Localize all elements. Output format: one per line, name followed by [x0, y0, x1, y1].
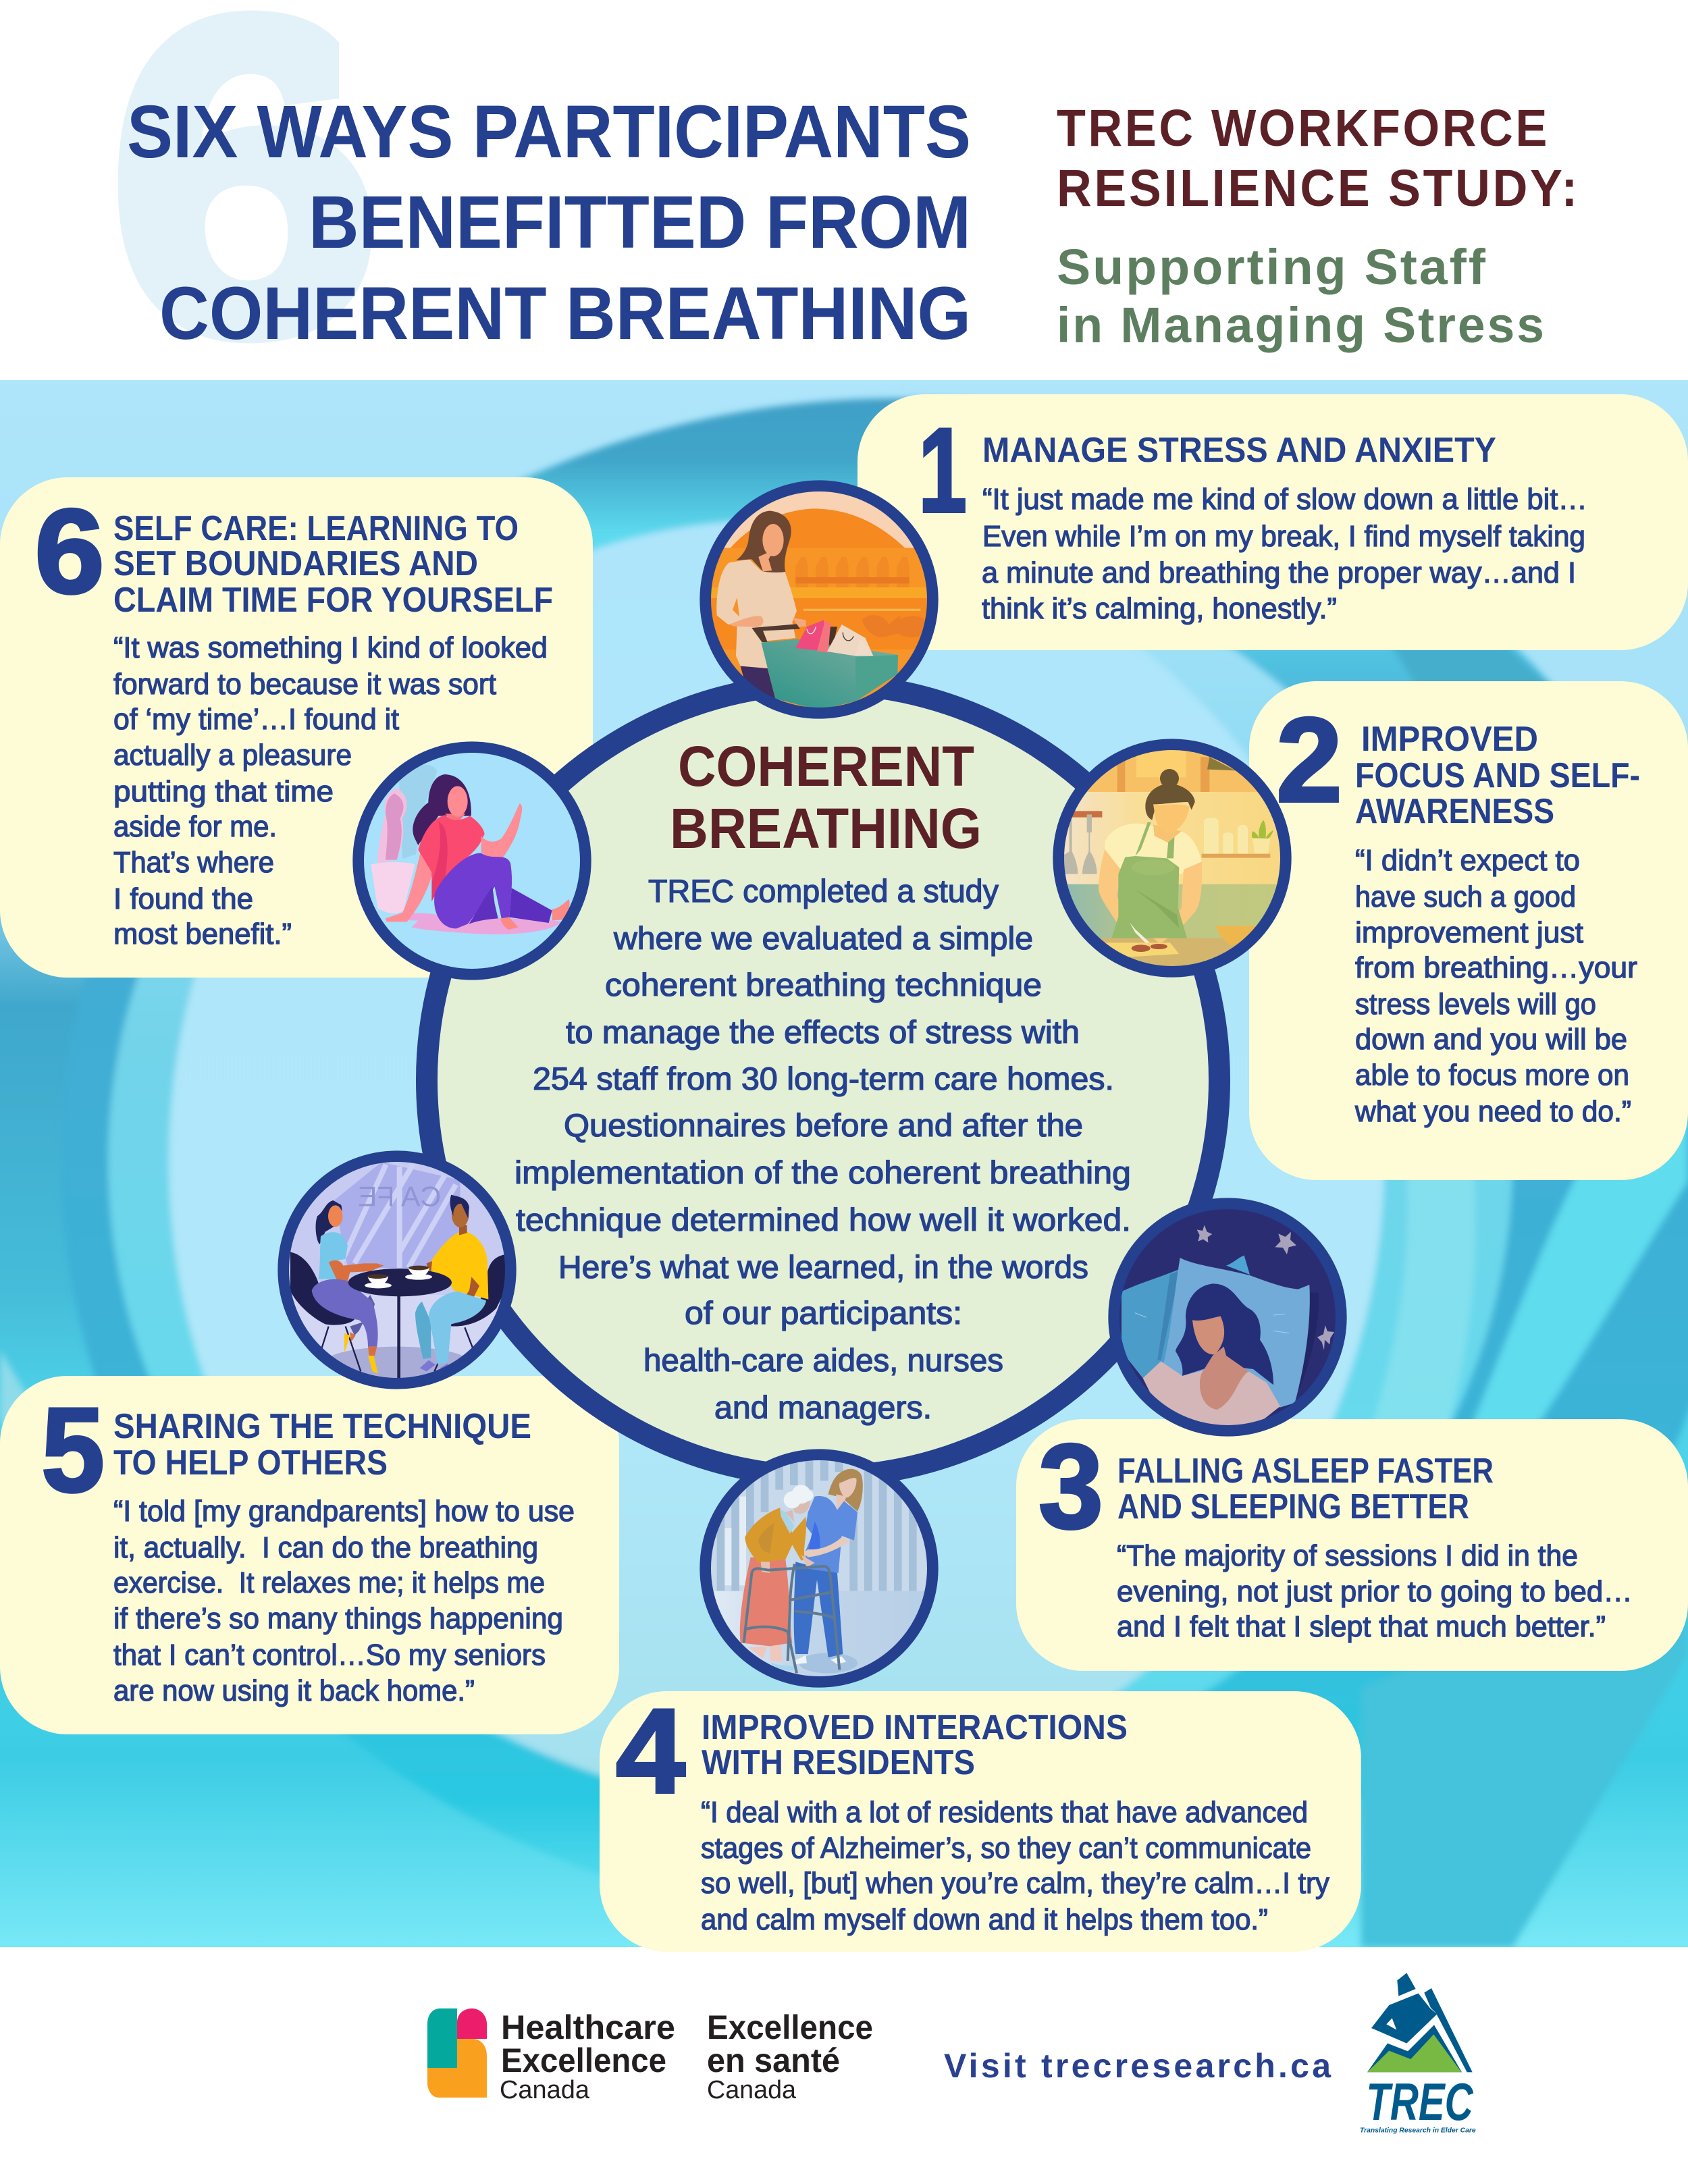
quote 4: [701, 1796, 1329, 1936]
quote 1: “It just made me kind of slow down a little bit…: [982, 483, 1587, 516]
quote 6: [113, 631, 548, 951]
quote 6: of ‘my time’…I found it: [113, 703, 399, 736]
icon: two people at cafe table: [273, 1146, 521, 1393]
central description: to manage the effects of stress with: [566, 1014, 1080, 1050]
main title: SIX WAYS PARTICIPANTS: [127, 90, 971, 174]
quote 3: [1117, 1539, 1633, 1643]
quote 5: if there’s so many things happening: [113, 1602, 563, 1635]
heading 6: SELF CARE: LEARNING TO: [113, 509, 519, 548]
icon: two people at cafe table: CA FE: [358, 1180, 441, 1212]
study heading: [1057, 99, 1580, 217]
central description: Here’s what we learned, in the words: [558, 1249, 1088, 1285]
quote 2: “I didn’t expect to: [1355, 844, 1580, 877]
logo wordmark english: Excellence: [501, 2042, 666, 2079]
quote 5: are now using it back home.”: [113, 1674, 475, 1707]
central heading: COHERENT: [678, 735, 974, 798]
main title: [127, 90, 971, 355]
quote 5: it, actually. I can do the breathing: [113, 1531, 538, 1564]
logo mark: [427, 2008, 487, 2098]
heading 6: SET BOUNDARIES AND: [113, 544, 478, 583]
quote 5: “I told [my grandparents] how to use: [113, 1495, 575, 1528]
main title: COHERENT BREATHING: [159, 272, 971, 355]
central description: of our participants:: [685, 1295, 962, 1331]
heading 1: MANAGE STRESS AND ANXIETY: [982, 431, 1496, 470]
website link: Visit trecresearch.ca: [944, 2047, 1331, 2085]
heading 2: IMPROVED: [1361, 720, 1538, 759]
number 2: 2: [1276, 693, 1342, 827]
heading 4: WITH RESIDENTS: [702, 1743, 975, 1782]
heading 4: [702, 1708, 1128, 1782]
quote 6: actually a pleasure: [113, 739, 352, 772]
study heading: RESILIENCE STUDY:: [1057, 159, 1580, 217]
card 5: sharing the technique: [0, 1376, 619, 1734]
card 2: improved focus: [1249, 681, 1688, 1180]
logo wordmark french: en santé: [707, 2042, 840, 2079]
quote 6: most benefit.”: [113, 917, 292, 951]
study subtitle: Supporting Staff: [1057, 239, 1487, 295]
healthcare excellence canada logo: [427, 2008, 873, 2104]
icon: woman cooking in kitchen: [1049, 735, 1296, 982]
central heading: [670, 735, 982, 860]
quote 3: and I felt that I slept that much better.”: [1117, 1610, 1606, 1643]
heading 4: IMPROVED INTERACTIONS: [702, 1708, 1128, 1747]
quote 2: from breathing…your: [1355, 951, 1637, 984]
heading 6: CLAIM TIME FOR YOURSELF: [113, 581, 553, 620]
quote 6: forward to because it was sort: [113, 668, 496, 701]
quote 2: [1354, 844, 1637, 1128]
heading 5: [113, 1407, 531, 1483]
quote 5: exercise. It relaxes me; it helps me: [113, 1566, 545, 1599]
icon: woman sitting and resting: [348, 737, 596, 984]
quote 6: putting that time: [113, 775, 334, 808]
quote 3: evening, not just prior to going to bed…: [1117, 1575, 1633, 1608]
number 5: 5: [41, 1383, 105, 1517]
card 1: manage stress and anxiety: [858, 394, 1688, 650]
central description: 254 staff from 30 long-term care homes.: [533, 1061, 1114, 1096]
number 6: 6: [34, 484, 105, 618]
logo wordmark french: Excellence: [707, 2008, 873, 2046]
logo wordmark english: Healthcare: [501, 2008, 675, 2046]
heading 5: SHARING THE TECHNIQUE: [113, 1407, 531, 1446]
quote 2: have such a good: [1355, 880, 1576, 913]
study subtitle: in Managing Stress: [1057, 297, 1546, 353]
quote 2: what you need to do.”: [1354, 1095, 1631, 1128]
central heading: BREATHING: [670, 797, 982, 860]
quote 6: aside for me.: [113, 810, 277, 843]
heading 2: FOCUS AND SELF-: [1355, 756, 1640, 795]
central description: where we evaluated a simple: [613, 920, 1033, 956]
heading 3: AND SLEEPING BETTER: [1117, 1487, 1469, 1526]
main title: BENEFITTED FROM: [309, 181, 971, 264]
heading 2: AWARENESS: [1355, 792, 1554, 831]
quote 1: Even while I’m on my break, I find myself taking: [982, 520, 1585, 553]
quote 2: improvement just: [1355, 916, 1583, 949]
icon: woman sleeping under stars: [1105, 1194, 1352, 1441]
swirl background band: [0, 380, 1688, 1947]
central circle panel: [427, 684, 1219, 1476]
quote 1: think it’s calming, honestly.”: [982, 592, 1337, 625]
central description: TREC completed a study: [648, 873, 999, 909]
heading 3: FALLING ASLEEP FASTER: [1117, 1451, 1494, 1491]
heading 3: [1117, 1451, 1494, 1526]
central description: and managers.: [714, 1389, 932, 1425]
icon: woman shopping with cart: [695, 476, 943, 723]
heading 2: [1355, 720, 1640, 831]
study heading: TREC WORKFORCE: [1057, 99, 1550, 157]
logo wordmark english: Canada: [500, 2076, 590, 2104]
heading 5: TO HELP OTHERS: [113, 1443, 388, 1483]
quote 5: [113, 1495, 575, 1707]
card 3: falling asleep faster: [1016, 1419, 1688, 1671]
card 4: improved interactions: [600, 1684, 1361, 1952]
quote 6: I found the: [113, 882, 253, 915]
heading 6: [113, 509, 553, 620]
logo wordmark english: [500, 2008, 675, 2104]
central description: Questionnaires before and after the: [564, 1107, 1083, 1143]
quote 5: that I can’t control…So my seniors: [113, 1639, 546, 1672]
quote 4: and calm myself down and it helps them too.”: [701, 1903, 1268, 1936]
quote 4: so well, [but] when you’re calm, they’re calm…I try: [701, 1867, 1329, 1900]
quote 3: “The majority of sessions I did in the: [1117, 1539, 1578, 1572]
central description: coherent breathing technique: [605, 967, 1042, 1003]
quote 1: [982, 483, 1587, 625]
quote 4: stages of Alzheimer’s, so they can’t communicate: [701, 1832, 1311, 1865]
quote 4: “I deal with a lot of residents that have advanced: [701, 1796, 1308, 1829]
central description: [515, 873, 1131, 1425]
logo wordmark french: Canada: [707, 2076, 797, 2104]
central description: technique determined how well it worked.: [516, 1202, 1131, 1237]
quote 2: able to focus more on: [1355, 1059, 1629, 1092]
TREC logo: Translating Research in Elder Care: [1360, 2127, 1476, 2134]
number 4: 4: [616, 1684, 685, 1818]
icon: nurse helping elder with walker: [695, 1445, 943, 1693]
number 3: 3: [1038, 1419, 1103, 1553]
logo wordmark french: [707, 2008, 873, 2104]
number 1: 1: [918, 403, 967, 537]
quote 6: That’s where: [113, 846, 274, 879]
TREC logo: [1360, 1973, 1476, 2134]
study subtitle: [1057, 239, 1546, 353]
central description: implementation of the coherent breathing: [515, 1154, 1131, 1190]
card 6: self care: [0, 477, 593, 978]
central description: health-care aides, nurses: [643, 1342, 1003, 1378]
quote 1: a minute and breathing the proper way…and I: [982, 556, 1576, 589]
quote 2: down and you will be: [1355, 1023, 1627, 1056]
TREC logo: TREC: [1366, 2072, 1474, 2131]
quote 2: stress levels will go: [1355, 988, 1596, 1021]
quote 6: “It was something I kind of looked: [113, 631, 548, 664]
